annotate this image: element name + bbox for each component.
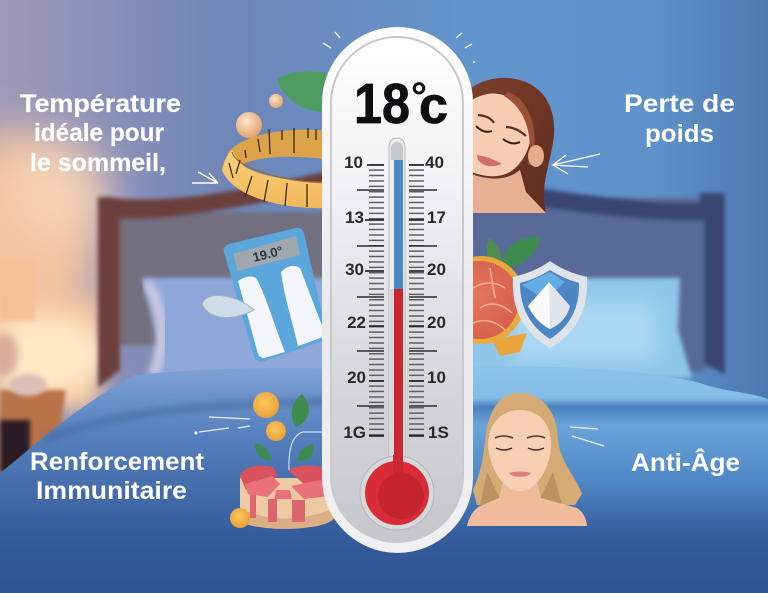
- temperature reading: 18: [354, 72, 410, 136]
- scale labels left: 22: [347, 313, 366, 332]
- rays: [323, 32, 475, 62]
- scale labels left: 13: [345, 208, 364, 227]
- mercury column: [394, 160, 403, 290]
- headboard: [118, 212, 340, 345]
- label: anti-aging: Anti-Âge: [631, 447, 740, 477]
- scale labels left: [343, 153, 366, 442]
- heading: ideal temperature: [20, 90, 181, 177]
- arrow: tape pointer: [192, 172, 218, 183]
- scale labels right: [425, 153, 449, 442]
- scale labels left: 1G: [343, 423, 366, 442]
- scale labels left: 30: [345, 260, 364, 279]
- heading: ideal temperature: le sommeil,: [30, 149, 166, 177]
- bedding: [0, 368, 420, 593]
- temperature reading: c: [419, 77, 448, 135]
- heading: ideal temperature: idéale pour: [34, 119, 164, 147]
- icon: fruit and shield: [437, 237, 587, 356]
- arrow: face pointer lines: [570, 427, 604, 446]
- label: immune boost: [30, 448, 205, 505]
- label: immune boost: Immunitaire: [36, 477, 187, 505]
- arrow: face brown pointer: [553, 154, 600, 174]
- scale labels right: 40: [425, 153, 444, 172]
- arrow: cake pointer lines: [195, 417, 250, 434]
- temperature reading: °: [411, 75, 427, 119]
- thermometer: [322, 27, 473, 553]
- scale labels right: 1S: [428, 423, 449, 442]
- bulb: [360, 455, 434, 530]
- icon: citrus cake: [230, 392, 335, 529]
- icon: shield: [513, 261, 587, 348]
- label: weight loss: poids: [645, 120, 714, 148]
- scale labels right: 20: [427, 313, 446, 332]
- icon: bathroom scale: 19.0°: [251, 243, 284, 265]
- scale labels left: 20: [347, 368, 366, 387]
- temperature reading: [354, 72, 448, 136]
- heading: ideal temperature: Température: [20, 90, 181, 118]
- nightstand: [0, 390, 66, 482]
- scale ticks: [357, 164, 437, 436]
- label: immune boost: Renforcement: [30, 448, 205, 476]
- scale labels left: 10: [344, 153, 363, 172]
- glass tube: [389, 138, 405, 462]
- scale labels right: 20: [427, 260, 446, 279]
- scale labels right: 10: [427, 368, 446, 387]
- label: weight loss: Perte de: [624, 90, 735, 118]
- icon: face brown hair: [466, 78, 554, 213]
- icon: bathroom scale: [202, 228, 326, 362]
- icon: face blonde hair: [467, 393, 587, 526]
- label: weight loss: [624, 90, 735, 148]
- pillows: [142, 278, 340, 382]
- scale labels right: 17: [427, 208, 446, 227]
- icon: measuring tape: [222, 72, 332, 208]
